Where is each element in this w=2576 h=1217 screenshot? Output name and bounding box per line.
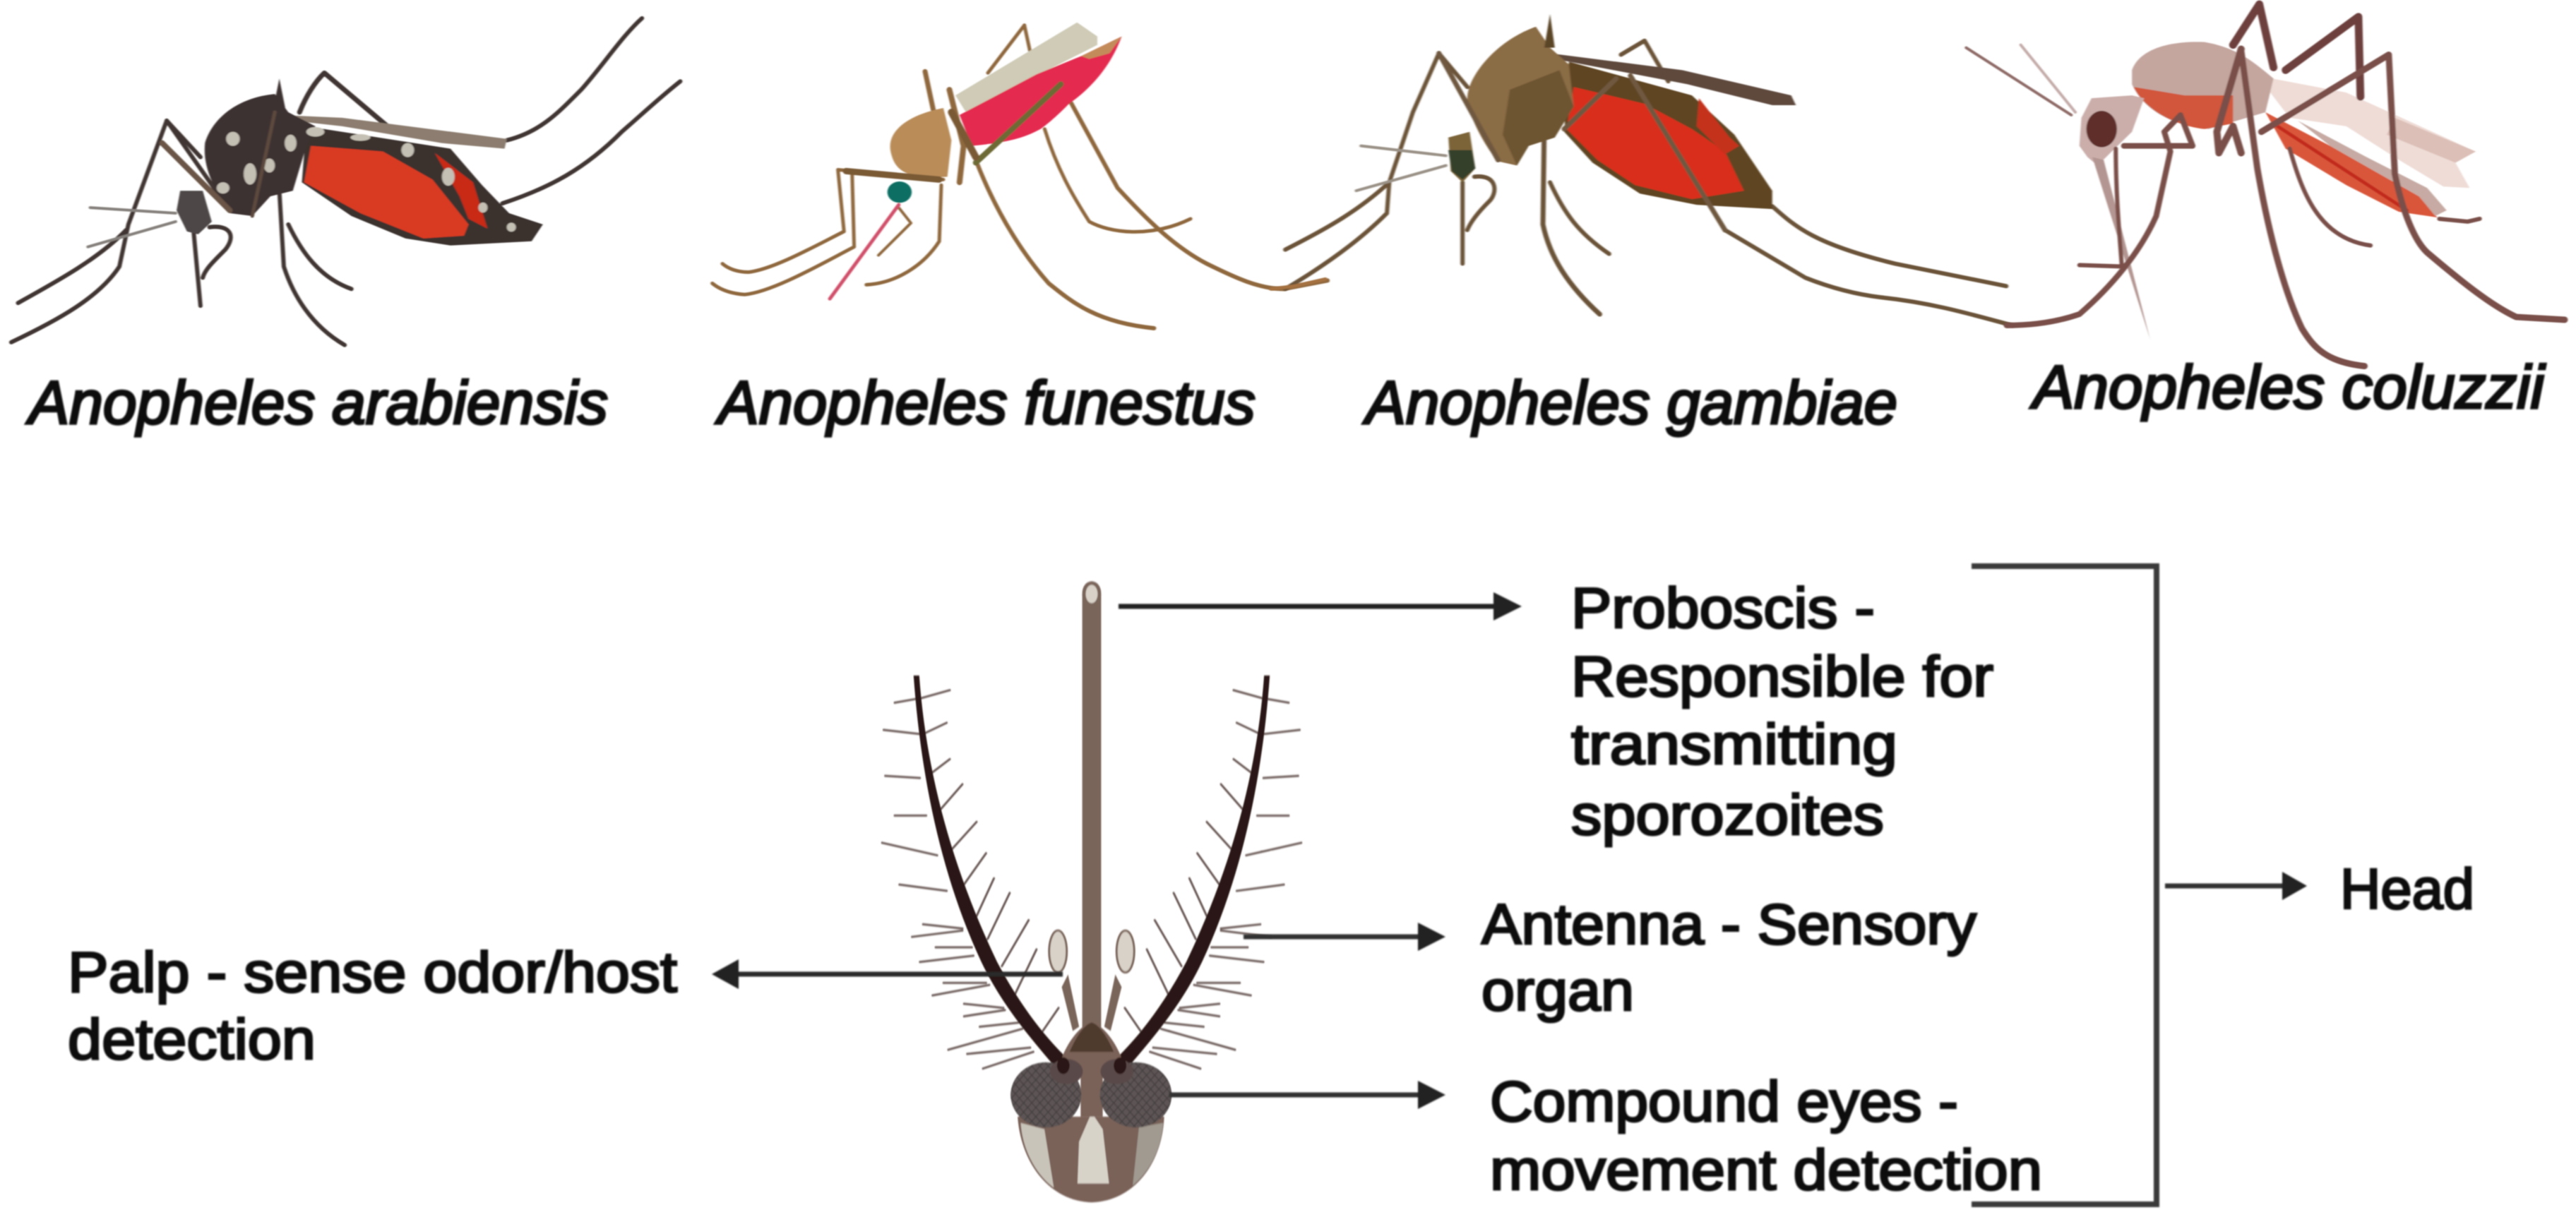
bracket: head parts <box>1972 566 2157 1204</box>
label: antenna: organ <box>1481 959 1634 1023</box>
species name: Anopheles gambiae: Anopheles gambiae <box>1362 369 1897 437</box>
illustration: Anopheles gambiae mosquito <box>1271 14 2012 325</box>
label: compound eyes <box>1490 1070 2042 1202</box>
label: antenna <box>1481 893 1977 1023</box>
label: palp <box>68 941 677 1072</box>
label: antenna: Antenna - Sensory <box>1481 893 1977 957</box>
label: palp: detection <box>68 1008 316 1072</box>
label: proboscis: sporozoites <box>1571 784 1884 847</box>
label: palp: Palp - sense odor/host <box>68 941 677 1005</box>
arrow: bracket to head <box>2165 872 2307 900</box>
label: compound eyes: Compound eyes - <box>1490 1070 1958 1134</box>
label: compound eyes: movement detection <box>1490 1139 2042 1202</box>
label: proboscis: Proboscis - <box>1571 577 1875 640</box>
label: proboscis <box>1571 577 1993 847</box>
illustration: Anopheles arabiensis mosquito <box>11 18 680 345</box>
label: proboscis: transmitting <box>1571 713 1897 777</box>
illustration: Anopheles coluzzii mosquito <box>1966 4 2565 366</box>
species name: Anopheles funestus: Anopheles funestus <box>715 369 1256 437</box>
illustration: mosquito head anatomy <box>882 582 1301 1202</box>
arrow: palp <box>712 959 1063 989</box>
arrow: antenna <box>1244 923 1445 951</box>
arrow: compound eyes <box>1169 1081 1445 1109</box>
arrow: proboscis <box>1119 592 1522 621</box>
species name: Anopheles arabiensis: Anopheles arabiensis <box>25 369 608 437</box>
illustration: Anopheles funestus mosquito <box>712 23 1328 328</box>
species name: Anopheles coluzzii: Anopheles coluzzii <box>2029 354 2546 421</box>
label: proboscis: Responsible for <box>1571 645 1993 709</box>
label: head: Head <box>2340 858 2474 921</box>
